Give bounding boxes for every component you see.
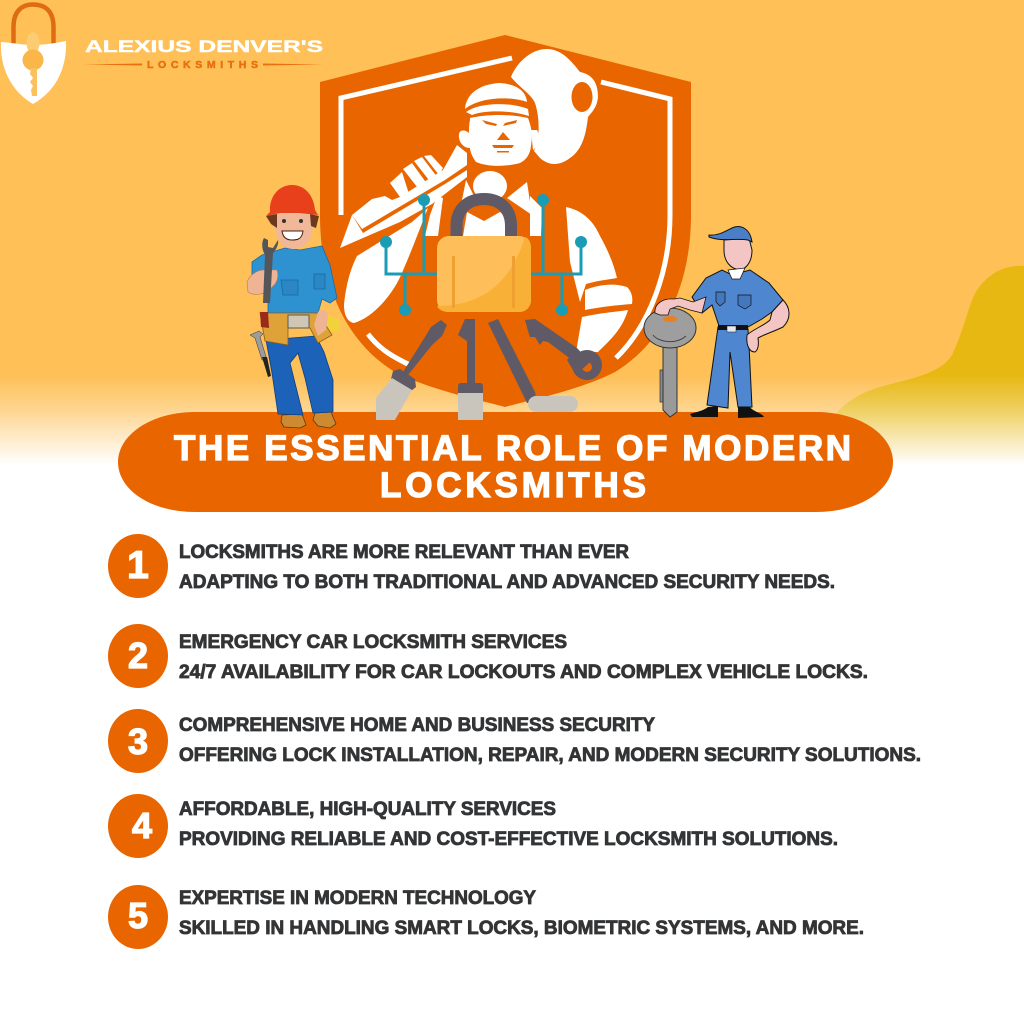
logo: Alexius Denver's Locksmiths (1, 4, 323, 104)
item 3 (108, 709, 921, 773)
shoes (690, 406, 764, 418)
right worker figure with giant key (644, 227, 789, 418)
item 5: 5 (128, 895, 148, 936)
item 1 (108, 534, 835, 598)
shield (320, 35, 691, 407)
background: orange-yellow sky with wave (0, 0, 1024, 485)
shirt (252, 246, 337, 313)
screwdriver (376, 320, 447, 420)
title banner (118, 412, 893, 512)
item 5: SKILLED IN HANDLING SMART LOCKS, BIOMETRIC SYSTEMS, AND MORE. (179, 917, 864, 939)
item 2 (108, 624, 868, 688)
giant key (644, 308, 696, 417)
bent arm (747, 300, 789, 352)
left worker figure with hard hat (247, 185, 340, 428)
tools below padlock (376, 319, 602, 420)
shield emblem with locksmith (320, 35, 691, 407)
item 5 (108, 885, 864, 949)
logo wordmark: ALEXIUS DENVER'S (85, 37, 323, 56)
jeans (266, 336, 333, 415)
shield inner white outline (341, 58, 670, 366)
head (724, 238, 752, 270)
padlock body (437, 236, 531, 312)
item 1: LOCKSMITHS ARE MORE RELEVANT THAN EVER (179, 541, 629, 563)
logo tagline: LOCKSMITHS (147, 59, 258, 71)
right hand (314, 310, 328, 336)
cap (709, 227, 752, 242)
logo icon: padlock shield with key (1, 4, 66, 104)
item 1: 1 (127, 544, 149, 587)
item 4: PROVIDING RELIABLE AND COST-EFFECTIVE LOCKSMITH SOLUTIONS. (179, 828, 838, 850)
long screwdriver (488, 319, 578, 412)
wrench lower ribbon (340, 170, 467, 248)
red hard hat (266, 185, 318, 216)
giant key on shoulder (511, 49, 598, 164)
belt (718, 325, 748, 332)
item 3: OFFERING LOCK INSTALLATION, REPAIR, AND MODERN SECURITY SOLUTIONS. (179, 744, 921, 766)
pants (707, 327, 752, 408)
circuit lines right (530, 194, 587, 316)
item 3: COMPREHENSIVE HOME AND BUSINESS SECURITY (179, 714, 655, 736)
smile (282, 231, 303, 240)
item 1: ADAPTING TO BOTH TRADITIONAL AND ADVANCED SECURITY NEEDS. (179, 571, 835, 593)
face (273, 214, 314, 249)
locksmith head (459, 83, 539, 166)
item 2: EMERGENCY CAR LOCKSMITH SERVICES (179, 631, 567, 653)
item 3: 3 (128, 721, 148, 762)
face features (482, 120, 517, 152)
hand on key (655, 297, 706, 315)
hair (266, 214, 319, 228)
boots (281, 412, 336, 428)
padlock with circuit lines (380, 194, 587, 316)
locksmith torso and arms (344, 171, 632, 358)
collar (728, 268, 745, 279)
padlock shackle (456, 199, 511, 238)
key wrench (525, 319, 602, 380)
item 4: AFFORDABLE, HIGH-QUALITY SERVICES (179, 798, 556, 820)
title line 1: THE ESSENTIAL ROLE OF MODERN (174, 429, 851, 468)
item 2: 24/7 AVAILABILITY FOR CAR LOCKOUTS AND COMPLEX VEHICLE LOCKS. (179, 661, 868, 683)
item 4: 4 (132, 805, 152, 846)
hammer (250, 331, 271, 377)
chisel (458, 319, 483, 420)
item 2: 2 (128, 635, 148, 676)
adjustable wrench (262, 238, 278, 303)
item 5: EXPERTISE IN MODERN TECHNOLOGY (179, 887, 536, 909)
title line 2: LOCKSMITHS (380, 466, 646, 505)
item 4 (108, 794, 838, 858)
yellow gloves (326, 315, 340, 331)
shirt pockets (716, 292, 751, 309)
circuit lines left (380, 194, 438, 316)
wrench and gripping hand (340, 145, 467, 248)
wrench upper strip (352, 145, 467, 229)
shirt (692, 270, 783, 327)
eyes (282, 219, 303, 223)
tool belt (260, 312, 332, 345)
fingers (390, 172, 410, 197)
left hand (247, 270, 278, 294)
list (108, 534, 921, 949)
